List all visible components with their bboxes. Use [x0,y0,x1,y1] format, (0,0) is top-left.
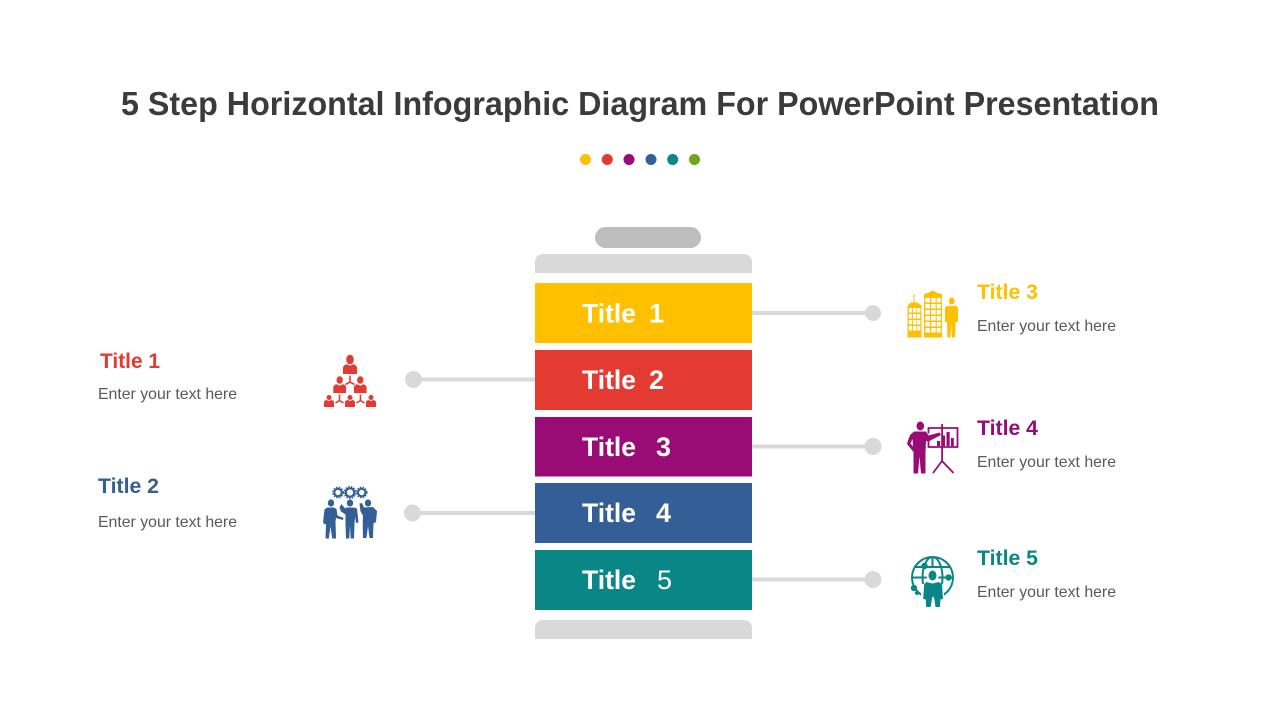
step bar 1 [535,283,752,343]
right item: Title 3 [977,281,1116,335]
right item: Title 4 [977,417,1116,471]
bottom cap [535,620,752,639]
left item: Title 1 [98,350,237,403]
step bar 1: Title [582,298,636,328]
stacked battery diagram [535,227,752,639]
step bar 5: Title [582,565,636,595]
right item: Title 5 [977,547,1116,601]
step bar 2: 2 [649,365,664,395]
connector lines and end dots [404,305,882,588]
right item: Title 3: Title 3 [977,281,1038,304]
step bar 1: 1 [649,298,664,328]
left item: Title 2: Title 2 [98,475,159,498]
icon: globe with businessman [911,557,953,608]
step bar 2 [535,350,752,410]
decorative colour dots row [580,154,700,165]
step bar 2: Title [582,365,636,395]
left item: Title 2: Enter your text here [98,514,237,531]
right item: Title 5: Enter your text here [977,584,1116,601]
left item: Title 1: Title 1 [100,350,160,373]
step bar 3: 3 [656,432,671,462]
step bar 3 [535,417,752,476]
right item: Title 4: Enter your text here [977,454,1116,471]
step bar 3: Title [582,432,636,462]
step bar 5 [535,550,752,610]
step bar 4: 4 [656,498,671,528]
right item: Title 4: Title 4 [977,417,1038,440]
left item: Title 1: Enter your text here [98,386,237,403]
right item: Title 3: Enter your text here [977,318,1116,335]
icon: presenter with chart board [907,422,958,474]
step bar 5: 5 [657,565,672,595]
title: 5 Step Horizontal Infographic Diagram For PowerPoint Presentation [121,85,1159,122]
icon: people hierarchy pyramid [324,355,376,407]
icon: city buildings and businessman [908,290,958,338]
step bar 4 [535,483,752,543]
right item: Title 5: Title 5 [977,547,1038,570]
left item: Title 2 [98,475,237,531]
step bar 4: Title [582,498,636,528]
battery handle [595,227,701,248]
top cap [535,254,752,273]
icon: team with gears [323,487,377,538]
